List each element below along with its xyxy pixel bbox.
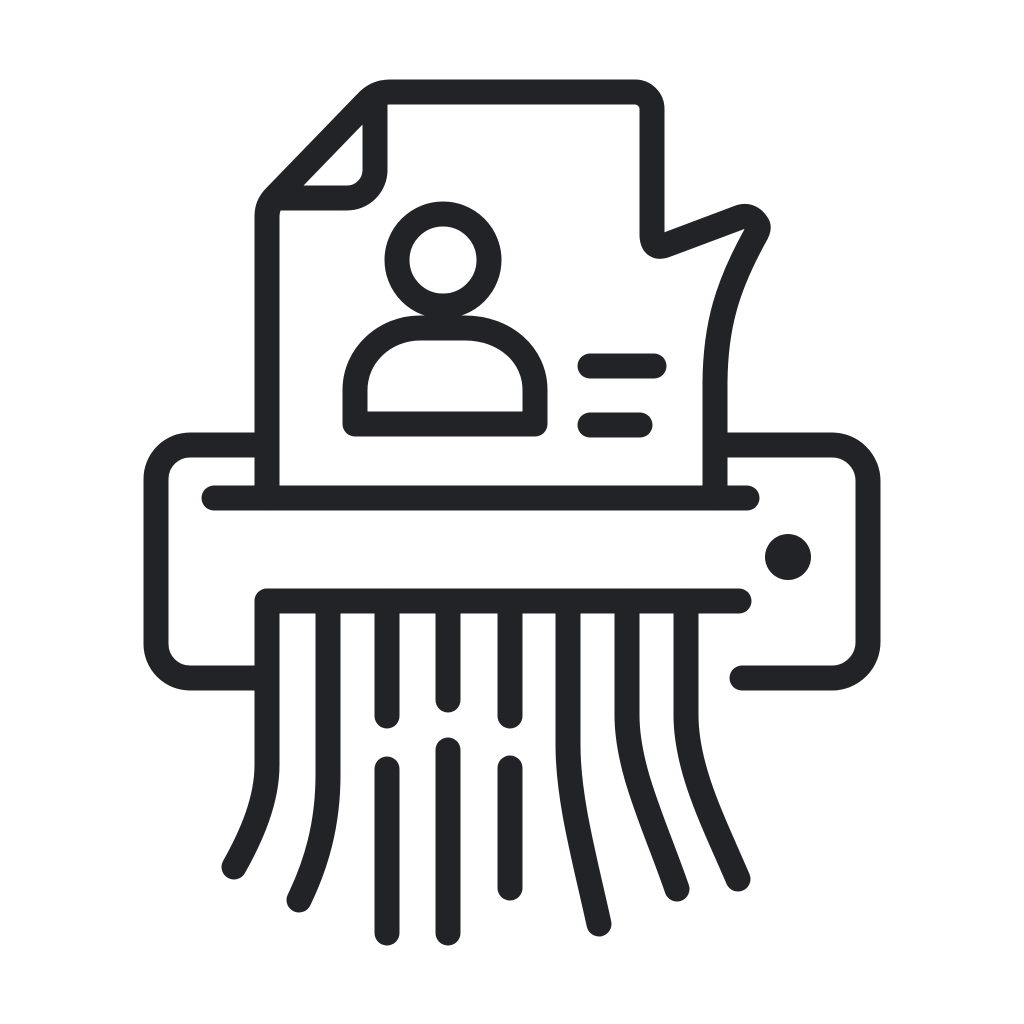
indicator button bbox=[765, 534, 811, 580]
document text lines bbox=[590, 366, 654, 425]
shredder body bbox=[156, 445, 868, 678]
shredded paper strips bbox=[234, 601, 738, 933]
person portrait icon bbox=[355, 214, 535, 424]
torn document sheet bbox=[267, 92, 758, 498]
document folded corner bbox=[275, 100, 375, 198]
